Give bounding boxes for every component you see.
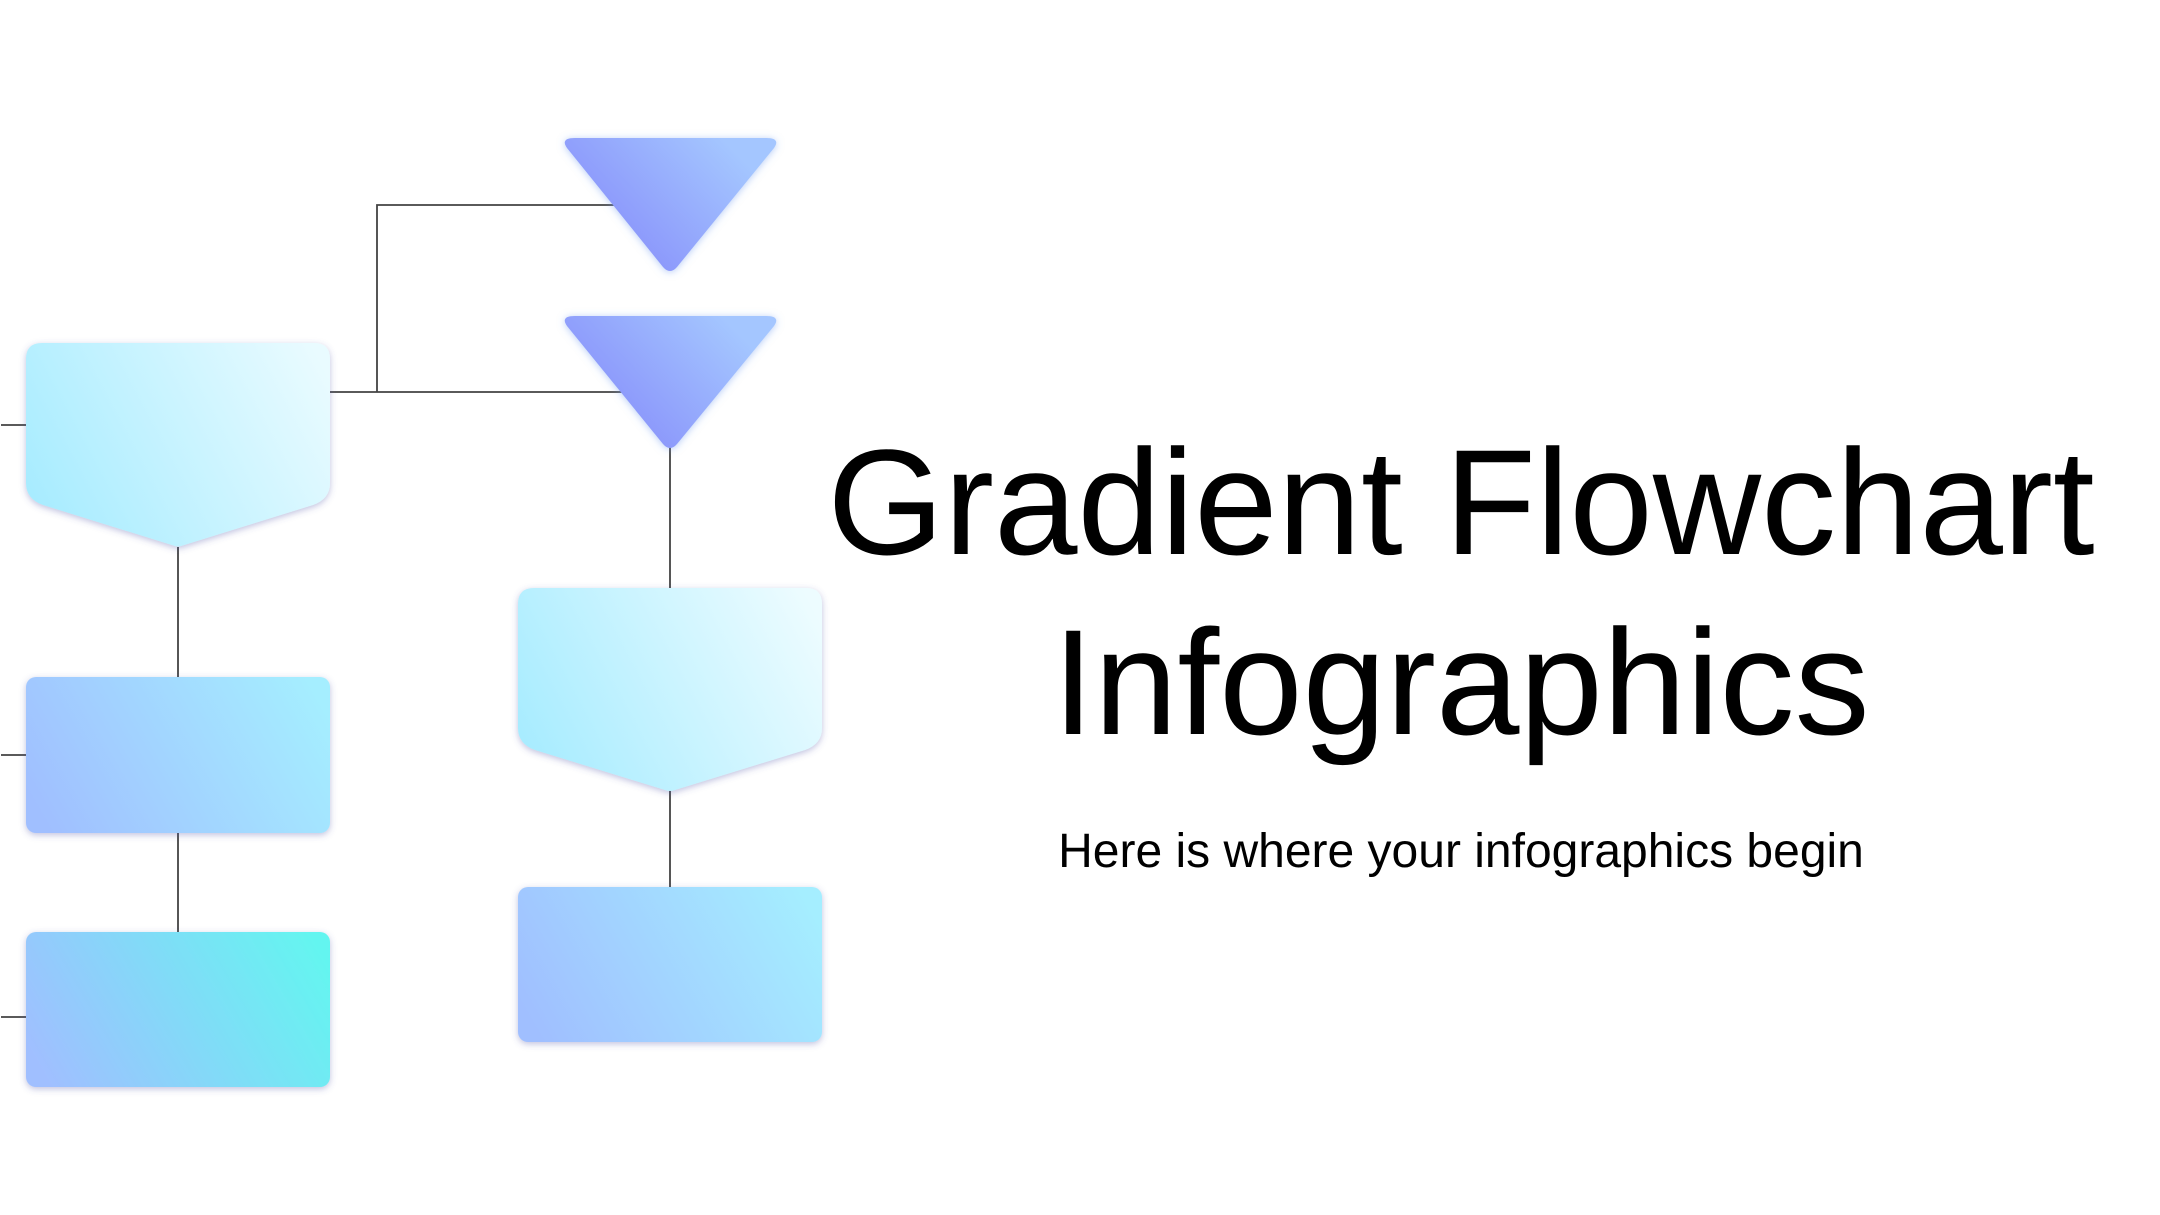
subtitle: Here is where your infographics begin [1058, 825, 1864, 878]
triangle node top [565, 138, 776, 271]
box left bottom [26, 932, 330, 1087]
title: Infographics [1052, 598, 1870, 766]
triangle node second [565, 316, 776, 448]
connector lines [1, 205, 670, 1017]
box left middle [26, 677, 330, 833]
pentagon node right [518, 588, 822, 791]
pentagon node left [26, 343, 330, 546]
title: Gradient Flowchart [827, 418, 2095, 586]
title [827, 418, 2095, 766]
box right bottom [518, 887, 822, 1042]
